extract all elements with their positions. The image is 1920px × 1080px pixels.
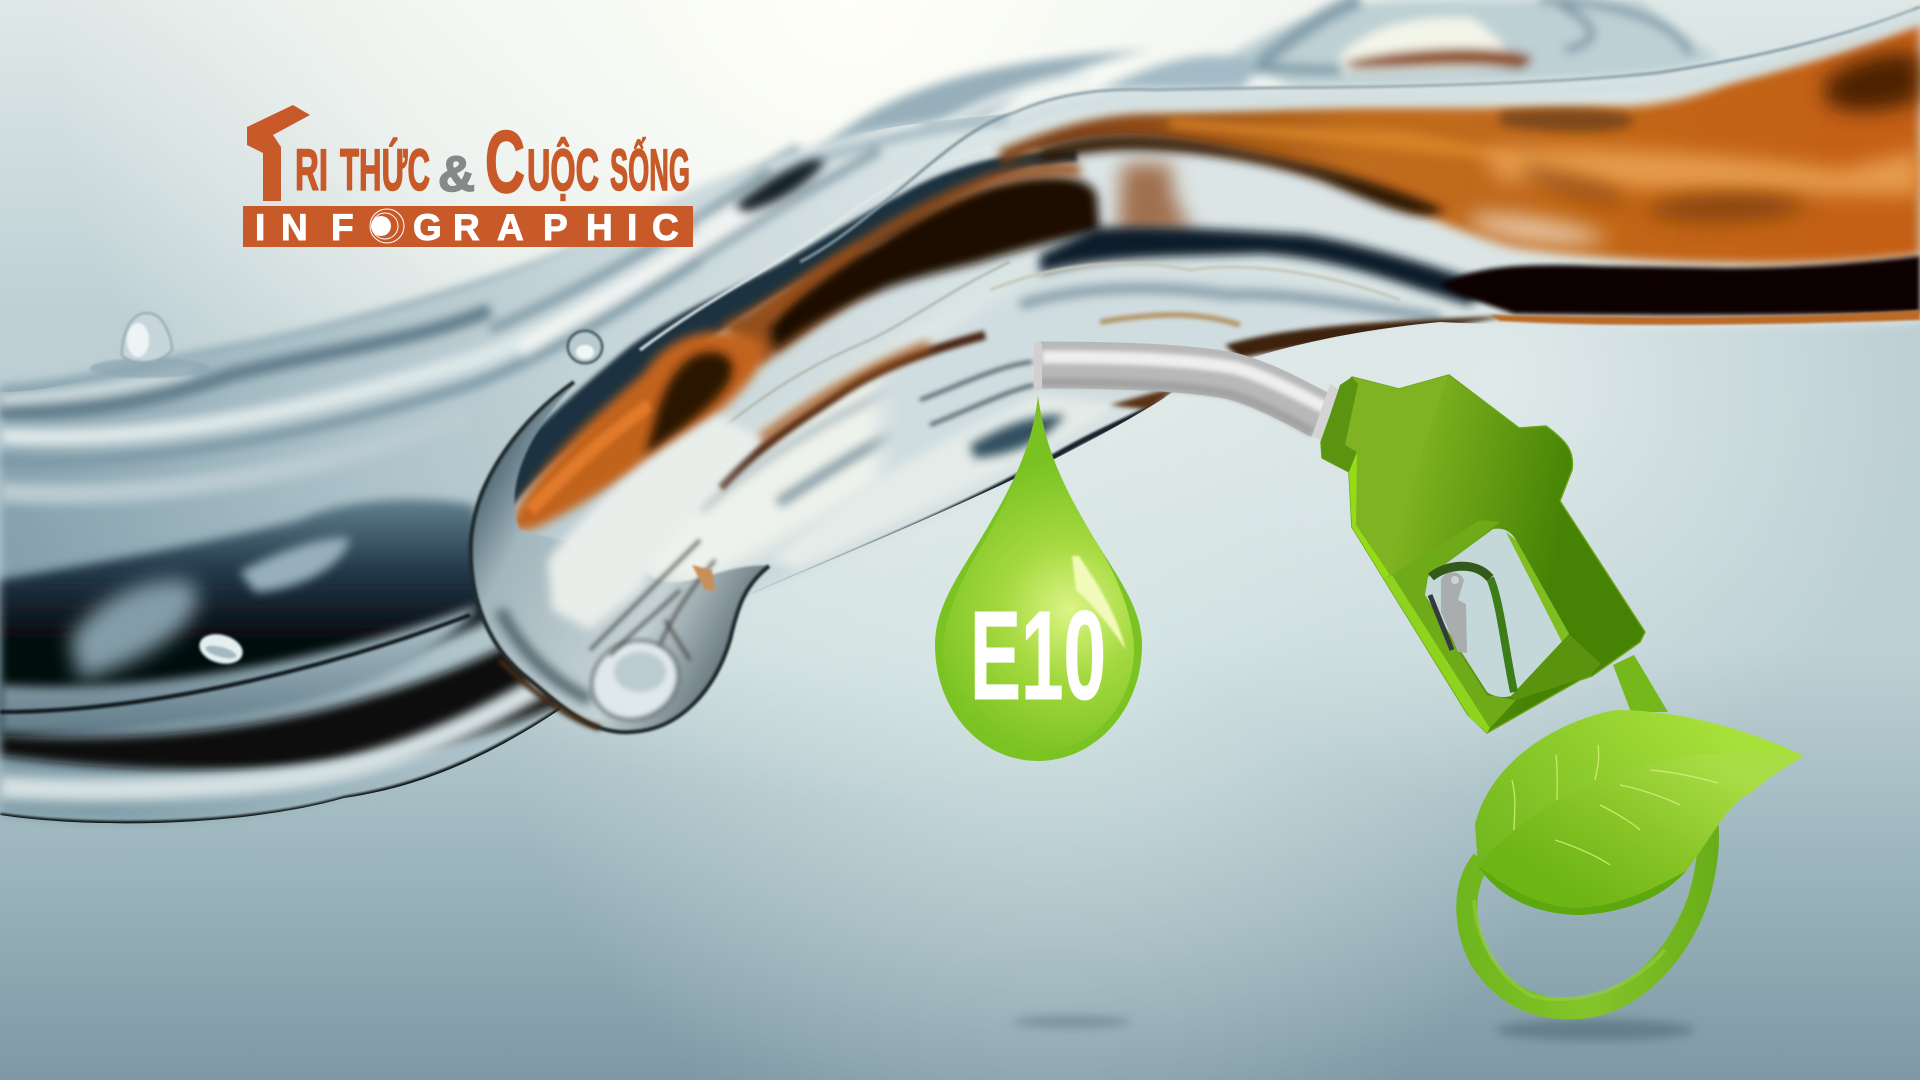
E10 droplet: [935, 396, 1142, 761]
logo wordmark: &: [438, 146, 475, 202]
logo wordmark: UỘC: [527, 138, 599, 203]
logo wordmark: [295, 112, 690, 211]
logo T mark: [247, 105, 310, 201]
fuel hose and loop: [1467, 655, 1708, 1009]
big hanging drop: [471, 382, 769, 733]
small droplets: [90, 313, 602, 668]
fuel gun body: [1321, 375, 1645, 733]
orange-brown link from lobe to mass: [720, 245, 880, 365]
logo circle O: [370, 209, 404, 243]
grey-blue mid band: [0, 605, 480, 735]
logo wordmark: C: [485, 112, 525, 211]
ground shadows: [1012, 1016, 1695, 1041]
logo wordmark: THỨC: [340, 138, 430, 203]
flowing liquid: [0, 0, 1920, 824]
grip opening: [1425, 529, 1569, 697]
orange lobe in stream: [508, 331, 765, 530]
illustration: E10 fuel over flowing liquid: SỐNG: [610, 138, 690, 203]
navy link into the black band: [1040, 227, 1490, 305]
upper-left soft ridge: [0, 150, 800, 392]
lower black band: [0, 644, 558, 776]
logo wordmark: RI: [295, 138, 328, 203]
lower pale band with navy edges: [770, 395, 1120, 570]
leaf: [1475, 710, 1804, 915]
logo: Tri Thức & Cuộc Sống Infographic: INFGRAPHIC: [255, 207, 679, 248]
dark blue-black swirl: [0, 500, 490, 735]
pale band below stream: [872, 252, 1376, 476]
logo banner: [243, 206, 693, 247]
outer tube rim: [800, 7, 1920, 262]
pale silver bands right of drop: [648, 312, 964, 583]
brown streak beside nozzle: [1225, 316, 1510, 358]
liquid body: [0, 7, 1920, 823]
soft streaks left and upper: [0, 118, 1010, 494]
trigger: [1490, 578, 1514, 692]
logo: Tri Thức & Cuộc Sống Infographic: [243, 105, 693, 248]
dark smudge upper: [735, 159, 825, 212]
navy band along tube: [480, 150, 1077, 510]
main orange mass: [1000, 23, 1920, 264]
nozzle spout: [1038, 345, 1343, 442]
brown-black mass rising to centre: [770, 176, 1100, 350]
E10 label: E10: [970, 585, 1106, 726]
upper splash wisps: [800, 0, 1720, 230]
black band on right: [1440, 256, 1920, 315]
